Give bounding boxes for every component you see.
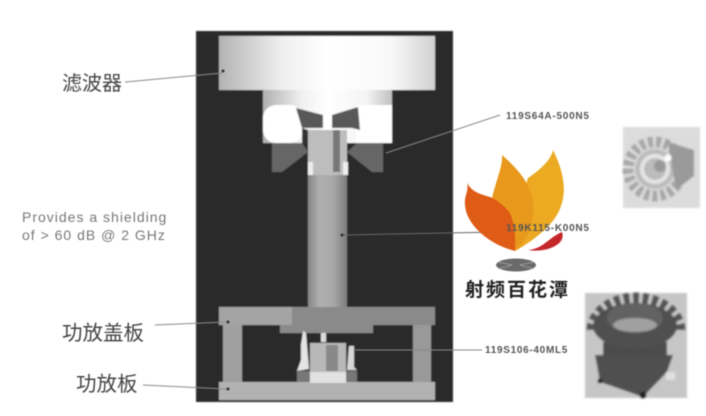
label: filter: 滤波器 — [62, 72, 122, 95]
anchor dots — [222, 70, 344, 390]
coaxial column — [308, 175, 347, 307]
amplifier connector — [297, 331, 357, 383]
frame legs — [223, 325, 242, 382]
photo: connector side view — [585, 293, 687, 398]
label: part 119S64A-500N5: 119S64A-500N5 — [506, 111, 590, 122]
label: amplifier cover: 功放盖板 — [62, 322, 144, 345]
amplifier plate — [219, 382, 435, 400]
inner connector — [308, 130, 348, 175]
label: shielding note: of > 60 dB @ 2 GHz — [22, 227, 166, 243]
panel: cross-section diagram — [196, 31, 453, 402]
leader lines — [125, 73, 500, 389]
label: shielding note: Provides a shielding — [22, 209, 167, 225]
photo: connector top view — [623, 127, 700, 208]
label: amplifier board: 功放板 — [76, 373, 138, 396]
filter body — [219, 36, 435, 143]
label: part 119K115-K00N5: 119K115-K00N5 — [506, 223, 590, 234]
label: part 119S106-40ML5: 119S106-40ML5 — [485, 345, 568, 356]
coupling wedges — [272, 107, 383, 172]
logo: flame petals — [465, 150, 564, 272]
logo text: 射频百花潭 — [465, 279, 570, 301]
amplifier cover plate — [219, 307, 435, 333]
